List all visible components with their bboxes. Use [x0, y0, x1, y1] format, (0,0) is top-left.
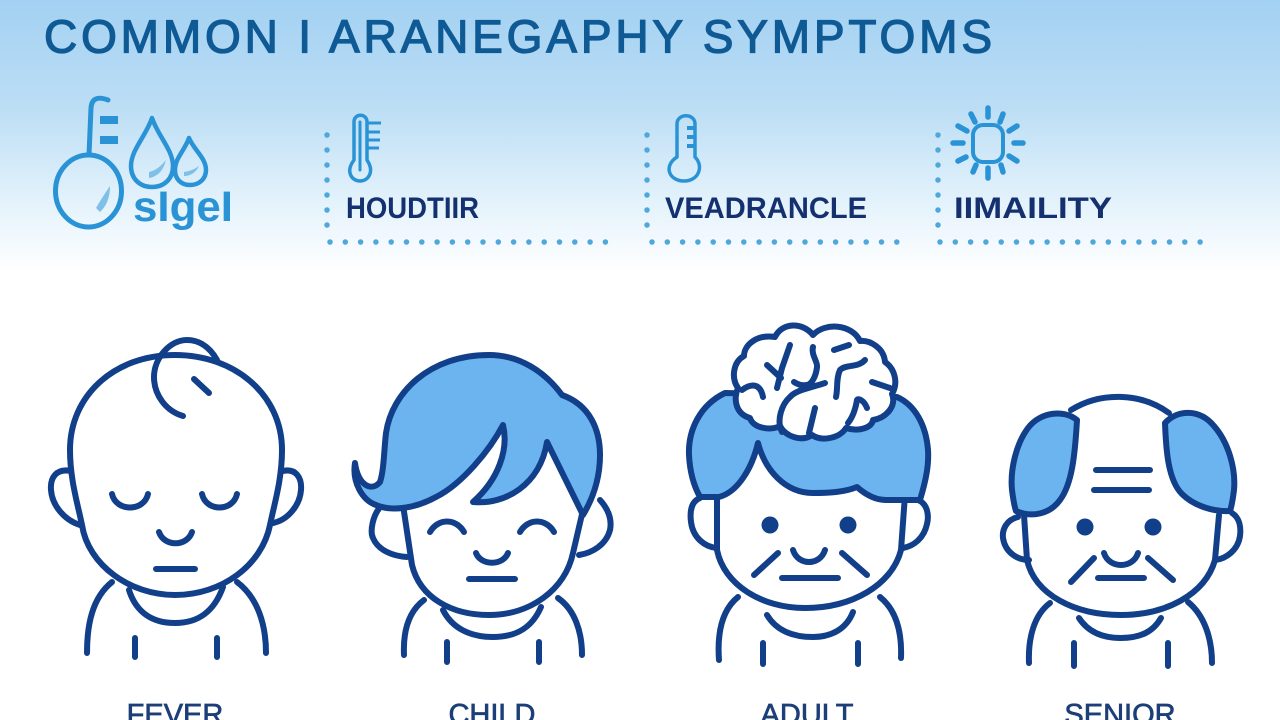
child body	[404, 598, 582, 662]
adult ears	[691, 498, 928, 548]
baby head	[70, 355, 282, 595]
senior right hair	[1165, 413, 1234, 511]
icon: thermometer	[669, 116, 699, 181]
card label: IIMAILITY	[954, 192, 1112, 225]
child hair	[354, 355, 600, 515]
label: signal: sIgeI	[133, 183, 233, 231]
icon: large thermometer	[56, 98, 122, 227]
figure: child	[354, 355, 611, 662]
brain folds	[742, 345, 890, 433]
figure: senior	[1003, 397, 1240, 666]
baby ears	[51, 470, 301, 525]
panel: card three	[938, 108, 1203, 242]
icon: sun	[953, 108, 1023, 178]
senior head	[1024, 397, 1219, 615]
figure: adult	[689, 325, 928, 664]
child ears	[372, 500, 611, 557]
card label: VEADRANCLE	[665, 192, 867, 225]
baby body	[87, 582, 266, 657]
figure: baby	[51, 340, 301, 657]
baby face	[112, 494, 237, 569]
child face details	[430, 522, 554, 579]
baby hair curl	[154, 340, 217, 416]
adult face	[717, 495, 905, 608]
senior body	[1029, 602, 1212, 666]
panel: card two	[647, 116, 900, 242]
adult face details	[762, 516, 778, 534]
icon: brain	[734, 325, 895, 439]
senior ears	[1003, 513, 1240, 560]
senior face details	[1076, 518, 1094, 536]
panel: card one	[327, 115, 609, 242]
title: COMMON I ARANEGAPHY SYMPTOMS	[44, 10, 992, 62]
adult body	[719, 597, 901, 664]
panel: signal icons	[56, 98, 233, 231]
icon: water drops	[131, 118, 206, 187]
adult hair	[689, 393, 928, 500]
child face	[403, 505, 583, 615]
icon: thermometer with ticks	[350, 115, 381, 181]
card label: HOUDTIIR	[346, 192, 479, 225]
senior left hair	[1012, 413, 1077, 514]
